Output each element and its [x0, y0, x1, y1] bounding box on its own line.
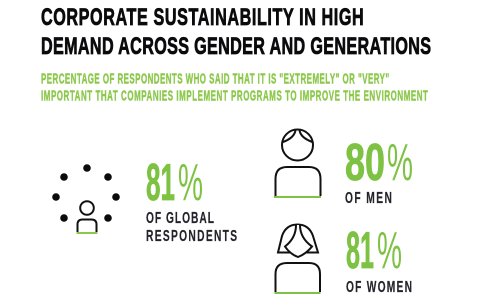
icon: global respondents: [52, 164, 120, 234]
title: DEMAND ACROSS GENDER AND GENERATIONS: [41, 33, 431, 60]
subtitle: PERCENTAGE OF RESPONDENTS WHO SAID THAT IT IS "EXTREMELY" OR "VERY": [41, 70, 389, 87]
stat: 81% women: 81: [346, 222, 374, 280]
label: of global respondents: RESPONDENTS: [146, 227, 237, 245]
subtitle: IMPORTANT THAT COMPANIES IMPLEMENT PROGRAMS TO IMPROVE THE ENVIRONMENT: [41, 87, 428, 104]
icon: woman: [274, 224, 320, 294]
icon: man: [274, 130, 321, 198]
stat: 80% men: 80: [345, 134, 385, 192]
title: CORPORATE SUSTAINABILITY IN HIGH: [41, 4, 364, 31]
label: of men: OF MEN: [345, 189, 392, 207]
label: of global respondents: [146, 209, 237, 245]
stat: 80% men: %: [387, 134, 413, 192]
label: of women: OF WOMEN: [346, 278, 412, 296]
stat: 81% global: 81: [146, 154, 175, 212]
label: of global respondents: OF GLOBAL: [146, 209, 214, 227]
stat: 81% women: %: [377, 222, 402, 280]
stat: 81% global: %: [178, 154, 203, 212]
subtitle: [41, 70, 428, 104]
title: [41, 4, 431, 60]
